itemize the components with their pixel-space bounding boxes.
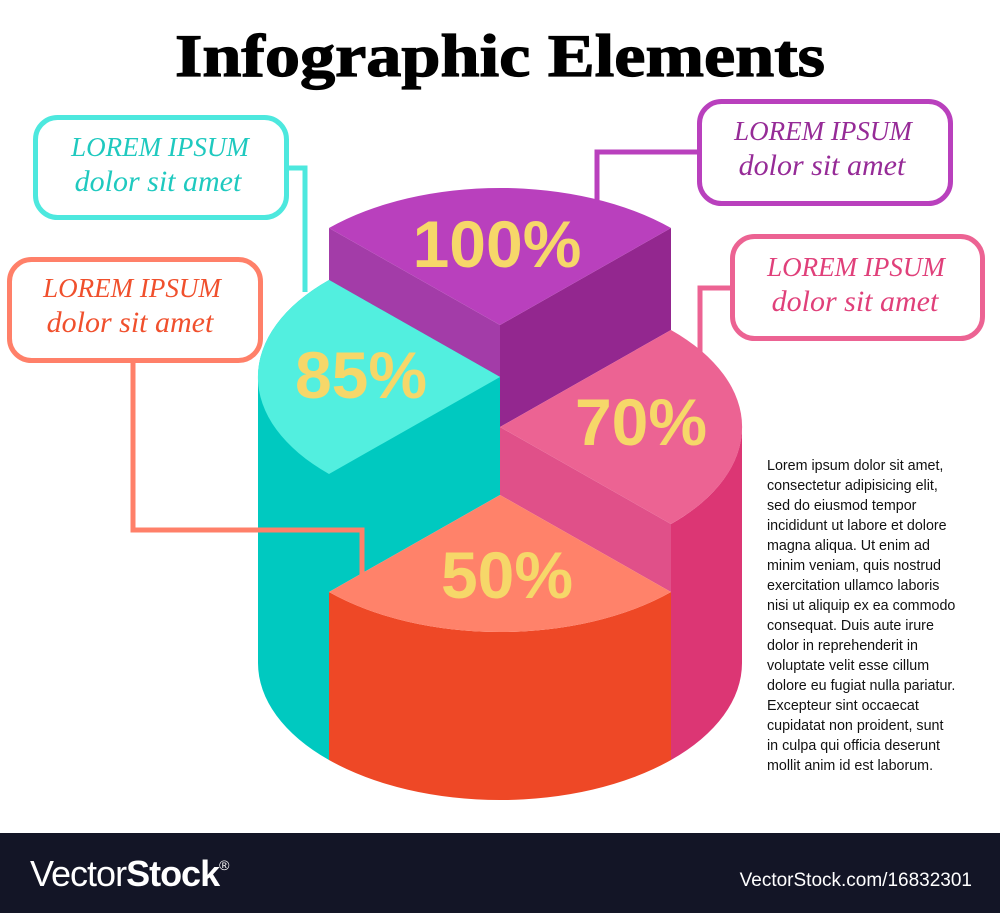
connector: orange: [133, 362, 362, 595]
footer bar: [0, 833, 1000, 913]
callout: orange: [10, 260, 260, 360]
connector: pink: [700, 288, 730, 352]
segment: pink 70%: [500, 330, 742, 760]
body text: Excepteur sint occaecat: [767, 698, 919, 714]
segment: teal 85%: [258, 280, 500, 760]
body text: consequat. Duis aute irure: [767, 618, 934, 634]
callout: pink: LOREM IPSUM: [766, 252, 946, 282]
callout: orange: dolor sit amet: [47, 306, 214, 339]
callout: pink: [732, 236, 982, 338]
body text: mollit anim id est laborum.: [767, 758, 933, 774]
connector: teal: [287, 168, 305, 292]
body text: dolore eu fugiat nulla pariatur.: [767, 678, 955, 694]
footer bar: ®: [219, 857, 230, 873]
callout: teal: [36, 118, 286, 218]
callout: teal: LOREM IPSUM: [70, 132, 250, 162]
chart: 3D pie cylinder: [133, 188, 742, 800]
segment: orange 50%: 50%: [441, 538, 573, 612]
connector: purple: [597, 152, 697, 205]
segment: teal 85%: 85%: [295, 338, 427, 412]
body text: dolor in reprehenderit in: [767, 638, 918, 654]
body text: voluptate velit esse cillum: [767, 658, 929, 674]
body text: nisi ut aliquip ex ea commodo: [767, 598, 955, 614]
body text: minim veniam, quis nostrud: [767, 558, 941, 574]
segment: pink 70%: 70%: [575, 385, 707, 459]
body text: magna aliqua. Ut enim ad: [767, 538, 930, 554]
segment: orange 50%: [329, 495, 671, 800]
body text: consectetur adipisicing elit,: [767, 478, 938, 494]
body text: cupidatat non proident, sunt: [767, 718, 943, 734]
footer bar: VectorStock.com/16832301: [740, 870, 972, 891]
body text: sed do eiusmod tempor: [767, 498, 917, 514]
segment: purple 100%: [329, 188, 671, 427]
callout: pink: dolor sit amet: [772, 285, 939, 318]
body text: exercitation ullamco laboris: [767, 578, 939, 594]
segment: purple 100%: 100%: [413, 207, 581, 281]
callout: teal: dolor sit amet: [75, 165, 242, 198]
body text: Lorem ipsum dolor sit amet,: [767, 458, 943, 474]
title: Infographic Elements: [175, 23, 825, 89]
callout: purple: dolor sit amet: [739, 149, 906, 182]
body text: in culpa qui officia deserunt: [767, 738, 940, 754]
callout: purple: [700, 102, 950, 204]
callout: orange: LOREM IPSUM: [42, 273, 222, 303]
footer bar: VectorStock: [30, 853, 219, 894]
callout: purple: LOREM IPSUM: [733, 116, 913, 146]
body text: incididunt ut labore et dolore: [767, 518, 947, 534]
